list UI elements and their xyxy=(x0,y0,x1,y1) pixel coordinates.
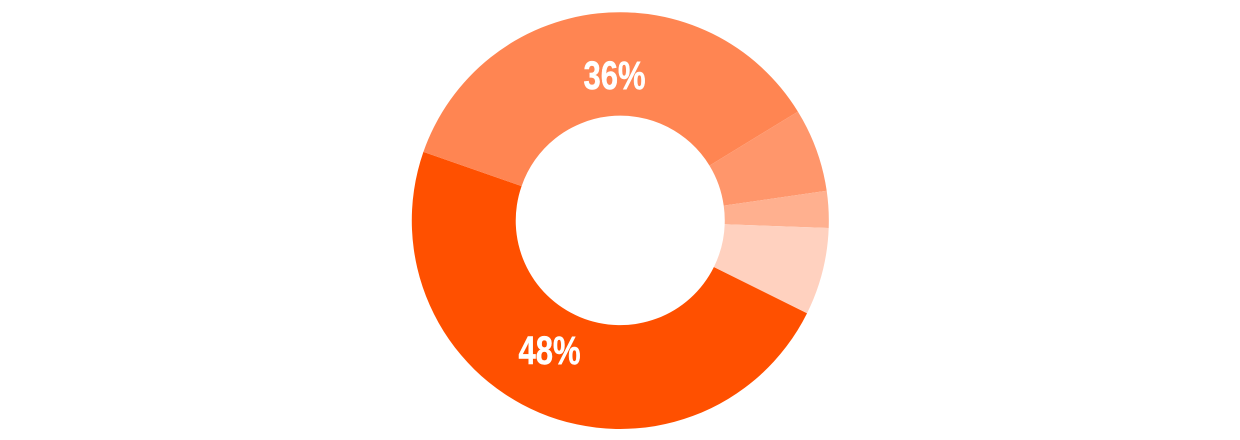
label: 36%: 36% xyxy=(584,54,646,98)
segment: 48% xyxy=(412,152,807,429)
segment: 36% xyxy=(423,12,798,186)
donut ring xyxy=(412,12,829,429)
segment: small slice 3 xyxy=(714,224,829,313)
label: 48%: 48% xyxy=(518,329,580,373)
segment: small slice 2 xyxy=(724,191,829,228)
segment: small slice 1 xyxy=(710,112,827,206)
